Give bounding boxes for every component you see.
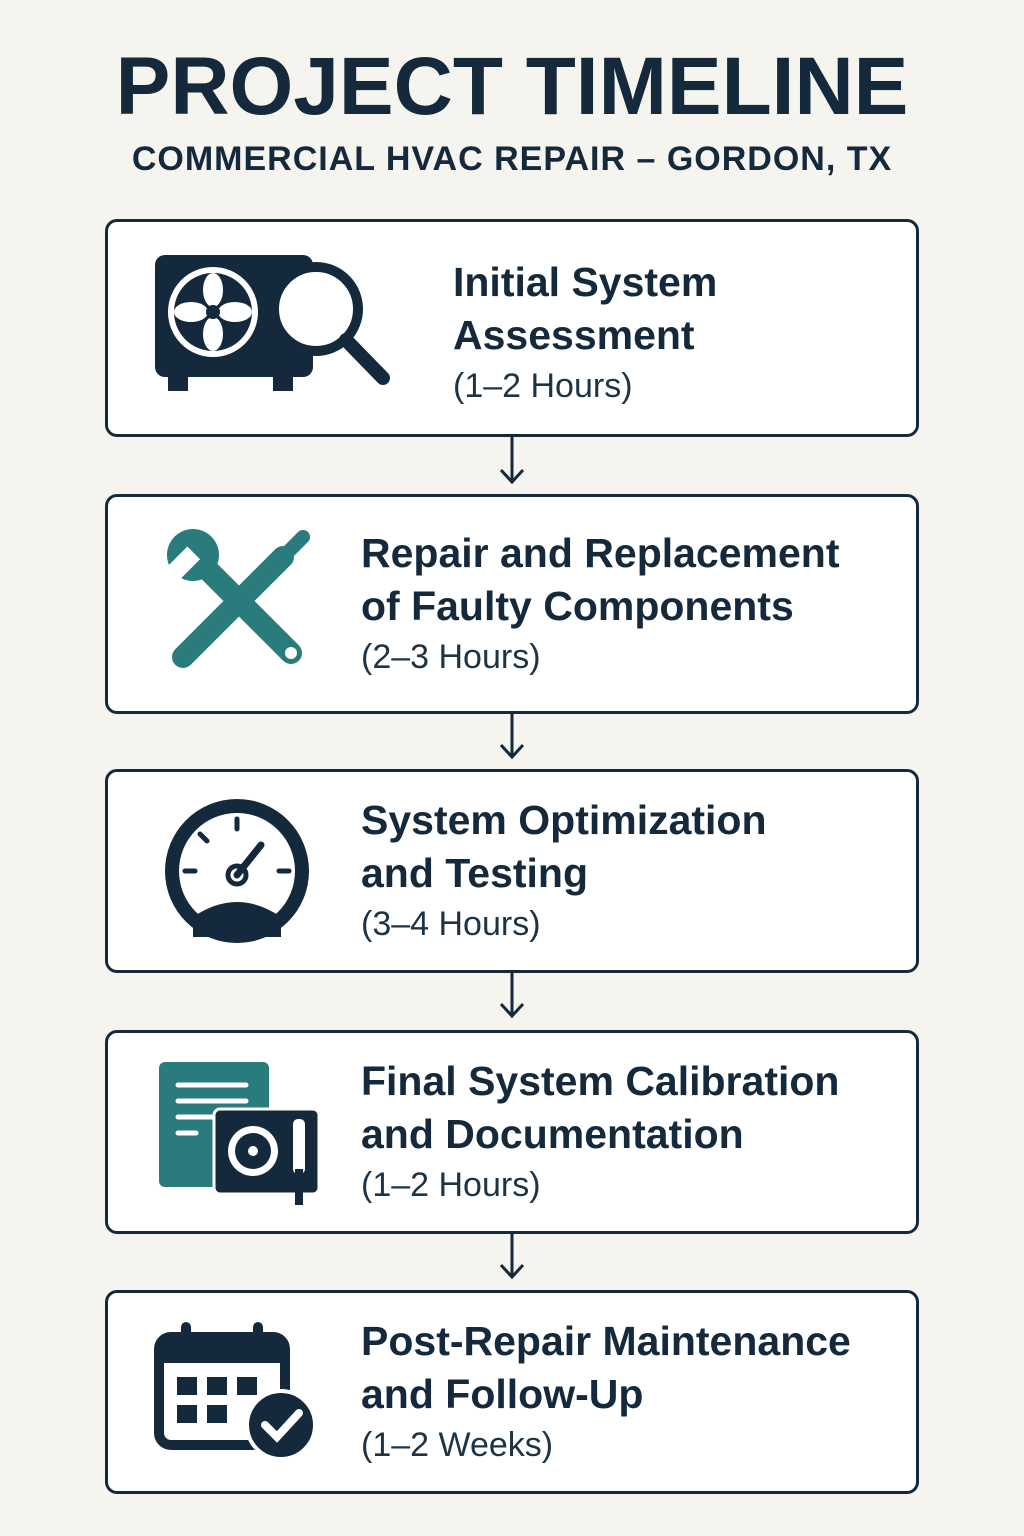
- icon: hvac unit with magnifier: [155, 255, 390, 391]
- text: step 4: and Documentation: [361, 1111, 744, 1157]
- text: step 4: Final System Calibration: [361, 1058, 839, 1104]
- text: step 5: [361, 1318, 851, 1464]
- panel: step 5: [105, 1290, 919, 1494]
- text: step 3: System Optimization: [361, 797, 767, 843]
- text: step 3: (3–4 Hours): [361, 905, 541, 943]
- text: step 4: (1–2 Hours): [361, 1166, 541, 1204]
- subtitle: COMMERCIAL HVAC REPAIR – GORDON, TX: [132, 140, 892, 178]
- text: step 3: and Testing: [361, 850, 588, 896]
- icon: gauge: [165, 799, 309, 943]
- text: step 3: [361, 797, 767, 943]
- text: step 1: Assessment: [453, 312, 695, 358]
- text: step 1: [453, 259, 717, 405]
- arrow: [500, 714, 524, 760]
- text: step 2: Repair and Replacement: [361, 530, 840, 576]
- arrow: [500, 1234, 524, 1280]
- text: step 5: (1–2 Weeks): [361, 1426, 553, 1464]
- icon: calendar with check: [154, 1322, 313, 1457]
- text: step 5: and Follow-Up: [361, 1371, 643, 1417]
- text: step 1: (1–2 Hours): [453, 367, 633, 405]
- panel: step 4: [105, 1030, 919, 1234]
- arrow: [500, 973, 524, 1018]
- text: step 1: Initial System: [453, 259, 717, 305]
- panel: step 3: [105, 769, 919, 973]
- icon: wrench and screwdriver: [167, 529, 310, 668]
- panel: step 2: [105, 494, 919, 714]
- text: step 4: [361, 1058, 839, 1204]
- arrow: [500, 437, 524, 484]
- text: step 2: of Faulty Components: [361, 583, 794, 629]
- text: step 5: Post-Repair Maintenance: [361, 1318, 851, 1364]
- title: PROJECT TIMELINE: [116, 41, 908, 132]
- panel: step 1: [105, 219, 919, 437]
- icon: document with unit: [159, 1062, 318, 1205]
- text: step 2: (2–3 Hours): [361, 638, 541, 676]
- text: step 2: [361, 530, 840, 676]
